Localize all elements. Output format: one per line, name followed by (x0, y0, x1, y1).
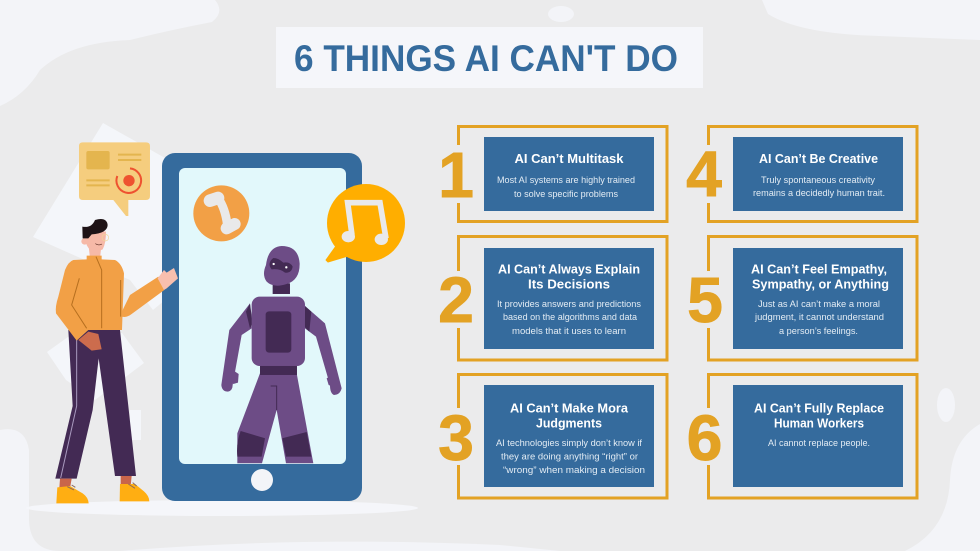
card 1: multitask: Most AI systems are highly trained (497, 175, 635, 186)
phone (162, 153, 362, 501)
card 5: empathy: Sympathy, or Anything (752, 278, 889, 292)
card 2: explain decisions: It provides answers and predictions (497, 299, 641, 310)
card 4: creative: Truly spontaneous creativity (761, 175, 875, 186)
card 1: multitask: AI Can’t Multitask (514, 152, 624, 166)
card 3: moral judgments: they are doing anything “right” or (501, 452, 639, 462)
card 4: creative: remains a decidedly human trait. (753, 188, 885, 199)
icon: music bubble (326, 184, 405, 262)
card 2: explain decisions: Its Decisions (528, 278, 610, 292)
card 6: replace workers: AI cannot replace people. (768, 438, 870, 449)
card 2: explain decisions: models that it uses to learn (512, 326, 626, 337)
title: 6 THINGS AI CAN'T DO (294, 38, 678, 79)
number 5: 5 (687, 264, 723, 336)
card 6: replace workers: AI Can’t Fully Replace (754, 402, 884, 416)
floor shadow (26, 500, 418, 516)
card 4: creative (686, 126, 917, 222)
card 5: empathy: judgment, it cannot understand (754, 312, 884, 323)
number 3: 3 (438, 402, 474, 474)
card 5: empathy: AI Can’t Feel Empathy, (751, 262, 887, 276)
title (276, 27, 703, 88)
number 4: 4 (686, 138, 722, 210)
card 1: multitask: to solve specific problems (514, 189, 618, 200)
card 1: multitask (438, 126, 667, 222)
card 4: creative: AI Can’t Be Creative (759, 152, 878, 166)
person (55, 219, 178, 503)
card 5: empathy: Just as AI can’t make a moral (758, 299, 880, 310)
number 6: 6 (687, 402, 722, 474)
card 5: empathy (687, 236, 917, 360)
card 3: moral judgments: “wrong” when making a decision (503, 465, 645, 476)
card 3: moral judgments: AI Can’t Make Mora (510, 402, 629, 416)
robot (221, 246, 342, 463)
card 5: empathy: a person’s feelings. (779, 326, 858, 337)
illustration: background paper shapes (33, 123, 165, 440)
icon: info speech bubble (79, 142, 150, 216)
card 6: replace workers (687, 374, 917, 498)
card 6: replace workers: Human Workers (774, 416, 864, 430)
number 2: 2 (438, 264, 474, 336)
card 2: explain decisions (438, 236, 667, 360)
number 1: 1 (438, 139, 474, 211)
icon: phone call bubble (193, 185, 249, 241)
card 3: moral judgments (438, 374, 667, 498)
card 2: explain decisions: AI Can’t Always Explain (498, 262, 640, 276)
card 2: explain decisions: based on the algorithms and data (503, 312, 638, 323)
card 3: moral judgments: Judgments (536, 416, 602, 430)
card 3: moral judgments: AI technologies simply don’t know if (496, 438, 642, 449)
